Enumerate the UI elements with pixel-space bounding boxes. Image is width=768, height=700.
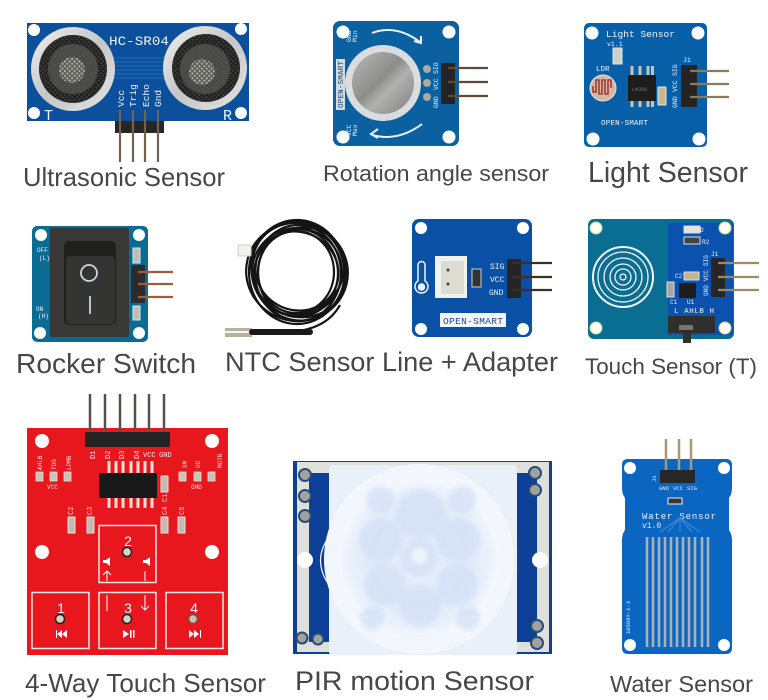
ultrasonic board [27,23,249,121]
4-way mounting holes [35,434,219,559]
rotation header pins [441,63,488,104]
rocker state labels [36,247,50,320]
panel: 4-way touch sensor [25,394,266,698]
4-way capacitor labels: C4 [162,507,170,515]
ultrasonic pin labels: Gnd [153,90,164,107]
touch LED and resistor [684,226,700,244]
touch pin labels: J1 [711,251,719,258]
4-way option labels: TOG [51,459,58,470]
NTC connector [238,245,251,256]
4-way option labels: OD [195,460,202,468]
PIR outline arc [320,537,329,585]
4-way pin labels: D1 [90,451,98,459]
rocker state labels: ON [36,306,44,313]
touch labels: C1 [670,299,678,306]
ultrasonic header pins [115,110,164,162]
light chip [628,66,656,107]
receiver transducer [163,26,247,110]
ultrasonic pin labels: Vcc [116,90,127,107]
touch control region [668,223,733,335]
adapter pin labels: VCC [490,276,505,285]
light pin labels [672,57,691,108]
4-way pin labels: D3 [119,451,127,459]
water pin labels: J1 [651,475,658,482]
touch pad 2: 2 [124,533,132,549]
touch pad 1: 1 [57,600,65,616]
adapter pin labels: GND [489,289,504,298]
light LDR [590,66,616,101]
rocker zero symbol [81,265,97,281]
ultrasonic pin labels [116,84,164,107]
NTC probe [225,328,310,337]
T and R marks: R [223,108,232,125]
water board title: Water Sensor [642,512,716,522]
rotation solder joints [423,65,431,101]
adapter mounting holes [415,222,529,335]
light chip: LM358 [632,87,647,93]
4-way capacitor labels: C2 [68,507,76,515]
rocker cap [64,241,116,325]
adapter pin labels [489,263,505,298]
T and R marks [44,108,232,125]
rocker state labels: (L) [39,255,50,262]
water pin labels [651,475,697,492]
4-way option labels: MOTB [217,453,224,468]
4-way chip [99,461,157,508]
light version text: v1.1 [607,41,623,48]
light mounting holes [586,26,706,146]
rocker header pins [131,265,173,303]
light pin labels: J1 [683,57,691,64]
rotation min and max text [346,30,359,136]
4-way jumper pads [36,472,215,481]
touch label: Touch Sensor (T) [585,354,757,379]
rotation pin labels: GND [433,96,440,108]
light capacitor [613,48,622,64]
water sensing traces [647,537,708,647]
ultrasonic mounting holes [28,23,247,119]
panel: light sensor [584,23,748,189]
NTC cable coil [232,203,366,337]
NTC label: NTC Sensor Line + Adapter [225,347,558,377]
touch pin labels: SIG [703,255,710,266]
4-way option labels: SM [182,460,189,468]
rocker housing [50,228,129,337]
touch pad 3: 3 [124,600,132,616]
rocker board [32,226,148,342]
touch pad 4: 4 [190,600,198,616]
4-way option labels: GND [191,484,202,491]
rotation brand strip: OPEN-SMART [338,61,346,108]
rotation label: Rotation angle sensor [323,161,549,186]
rotation board [333,21,459,146]
panel: rocker switch [16,226,196,379]
water mounting holes [624,462,730,651]
rotation mounting holes [336,26,456,144]
4-way option labels [37,453,224,491]
PIR silver edges [297,462,549,652]
adapter pin labels: SIG [490,263,505,272]
touch pad 2 [99,526,156,582]
rotation pin labels: VCC [433,78,440,90]
rotation min and max text: Min [352,30,359,42]
4-way board [27,428,228,655]
4-way pin labels: D4 [134,451,142,459]
4-way capacitor labels [68,494,187,515]
4-way pin labels: GND [159,452,172,460]
rotation min and max text: Max [352,124,359,136]
touch mounting holes [590,222,731,334]
light LDR: LDR [596,66,610,74]
panel: temperature adapter [412,219,552,337]
touch labels [670,227,710,306]
panel: water sensor [610,439,753,697]
rocker label: Rocker Switch [16,348,196,379]
light second capacitor [658,87,666,105]
ultrasonic pin labels: Trig [128,84,139,107]
4-way label: 4-Way Touch Sensor [25,668,266,698]
touch chip [679,283,696,298]
water part number: 10589Y-1-3 [625,601,632,634]
rotation min and max text: GND [346,30,353,42]
PIR side holes [297,552,548,568]
PIR solder points [296,467,543,649]
touch pad 4 [166,592,223,648]
ultrasonic traces [114,58,164,78]
ultrasonic model text: HC-SR04 [109,35,169,49]
PIR board [293,461,552,654]
water pin labels: SIG [687,485,697,492]
touch pad 3 [99,592,156,648]
rotation knob [345,45,421,121]
4-way pin labels: VCC [143,452,156,460]
water label: Water Sensor [610,671,753,697]
light brand text: OPEN-SMART [601,120,648,128]
rotation direction arrows [371,30,422,138]
light pin labels: VCC [672,80,679,92]
water board [622,459,732,654]
panel: NTC sensor line [225,203,558,377]
ultrasonic pin labels: Echo [141,84,152,107]
rotation pin labels [433,62,440,108]
adapter resistor [472,269,481,287]
4-way capacitor labels: C1 [162,494,170,502]
light pin labels: SIG [672,64,679,76]
4-way header pins [85,394,170,447]
thermometer icon [415,262,428,293]
4-way capacitors [68,476,185,533]
panel: PIR motion sensor [293,461,552,696]
ultrasonic label: Ultrasonic Sensor [23,162,225,192]
rocker resistors [133,248,140,320]
touch capacitors [667,272,699,297]
4-way option labels: AHLB [37,455,44,470]
adapter board [412,219,532,337]
water header pins [660,439,695,483]
touch pad 1 [32,592,89,648]
4-way option labels: VCC [47,484,58,491]
light board [584,23,707,147]
touch labels: D [700,227,704,234]
touch pad rings [593,247,653,307]
light label: Light Sensor [588,157,748,189]
touch pin labels [703,251,719,296]
adapter brand strip: OPEN-SMART [443,316,503,327]
adapter header pins [507,259,552,298]
rotation pin labels: SIG [433,62,440,74]
touch pin labels: GND [703,285,710,296]
light board title: Light Sensor [606,29,675,40]
4-way option labels: LPMB [66,455,73,470]
water pin labels: VCC [673,485,684,492]
T and R marks: T [44,108,53,125]
4-way capacitor labels: C3 [87,507,95,515]
PIR dome base [329,465,517,655]
4-way capacitor labels: C5 [179,507,187,515]
4-way pin labels: D2 [105,451,113,459]
water resistor [668,498,682,504]
water version text: v1.0 [642,522,661,531]
transmitter transducer [31,27,115,111]
touch labels: U1 [687,299,695,306]
rocker mounting holes [34,229,145,339]
touch pin labels: VCC [703,270,710,281]
touch labels: R2 [702,239,710,246]
light pin labels: GND [672,96,679,108]
touch header pins [711,258,759,297]
touch mode labels: L AHLB H [674,308,714,316]
touch labels: C2 [675,273,683,280]
touch slide switch [668,316,715,343]
panel: rotation angle sensor [323,21,549,186]
4-way pin labels [90,451,172,460]
panel: touch sensor [585,219,759,379]
panel: ultrasonic sensor [23,23,249,192]
water trace fan [660,518,700,532]
PIR label: PIR motion Sensor [295,666,534,696]
touch board [588,219,734,339]
water pin labels: GND [659,485,670,492]
light header pins [681,65,729,107]
adapter connector [435,256,467,298]
PIR fresnel lens [324,464,514,654]
rocker one symbol [89,296,91,314]
rocker state labels: (H) [38,313,49,320]
rotation min and max text: VCC [346,124,353,136]
rocker state labels: OFF [37,247,48,254]
